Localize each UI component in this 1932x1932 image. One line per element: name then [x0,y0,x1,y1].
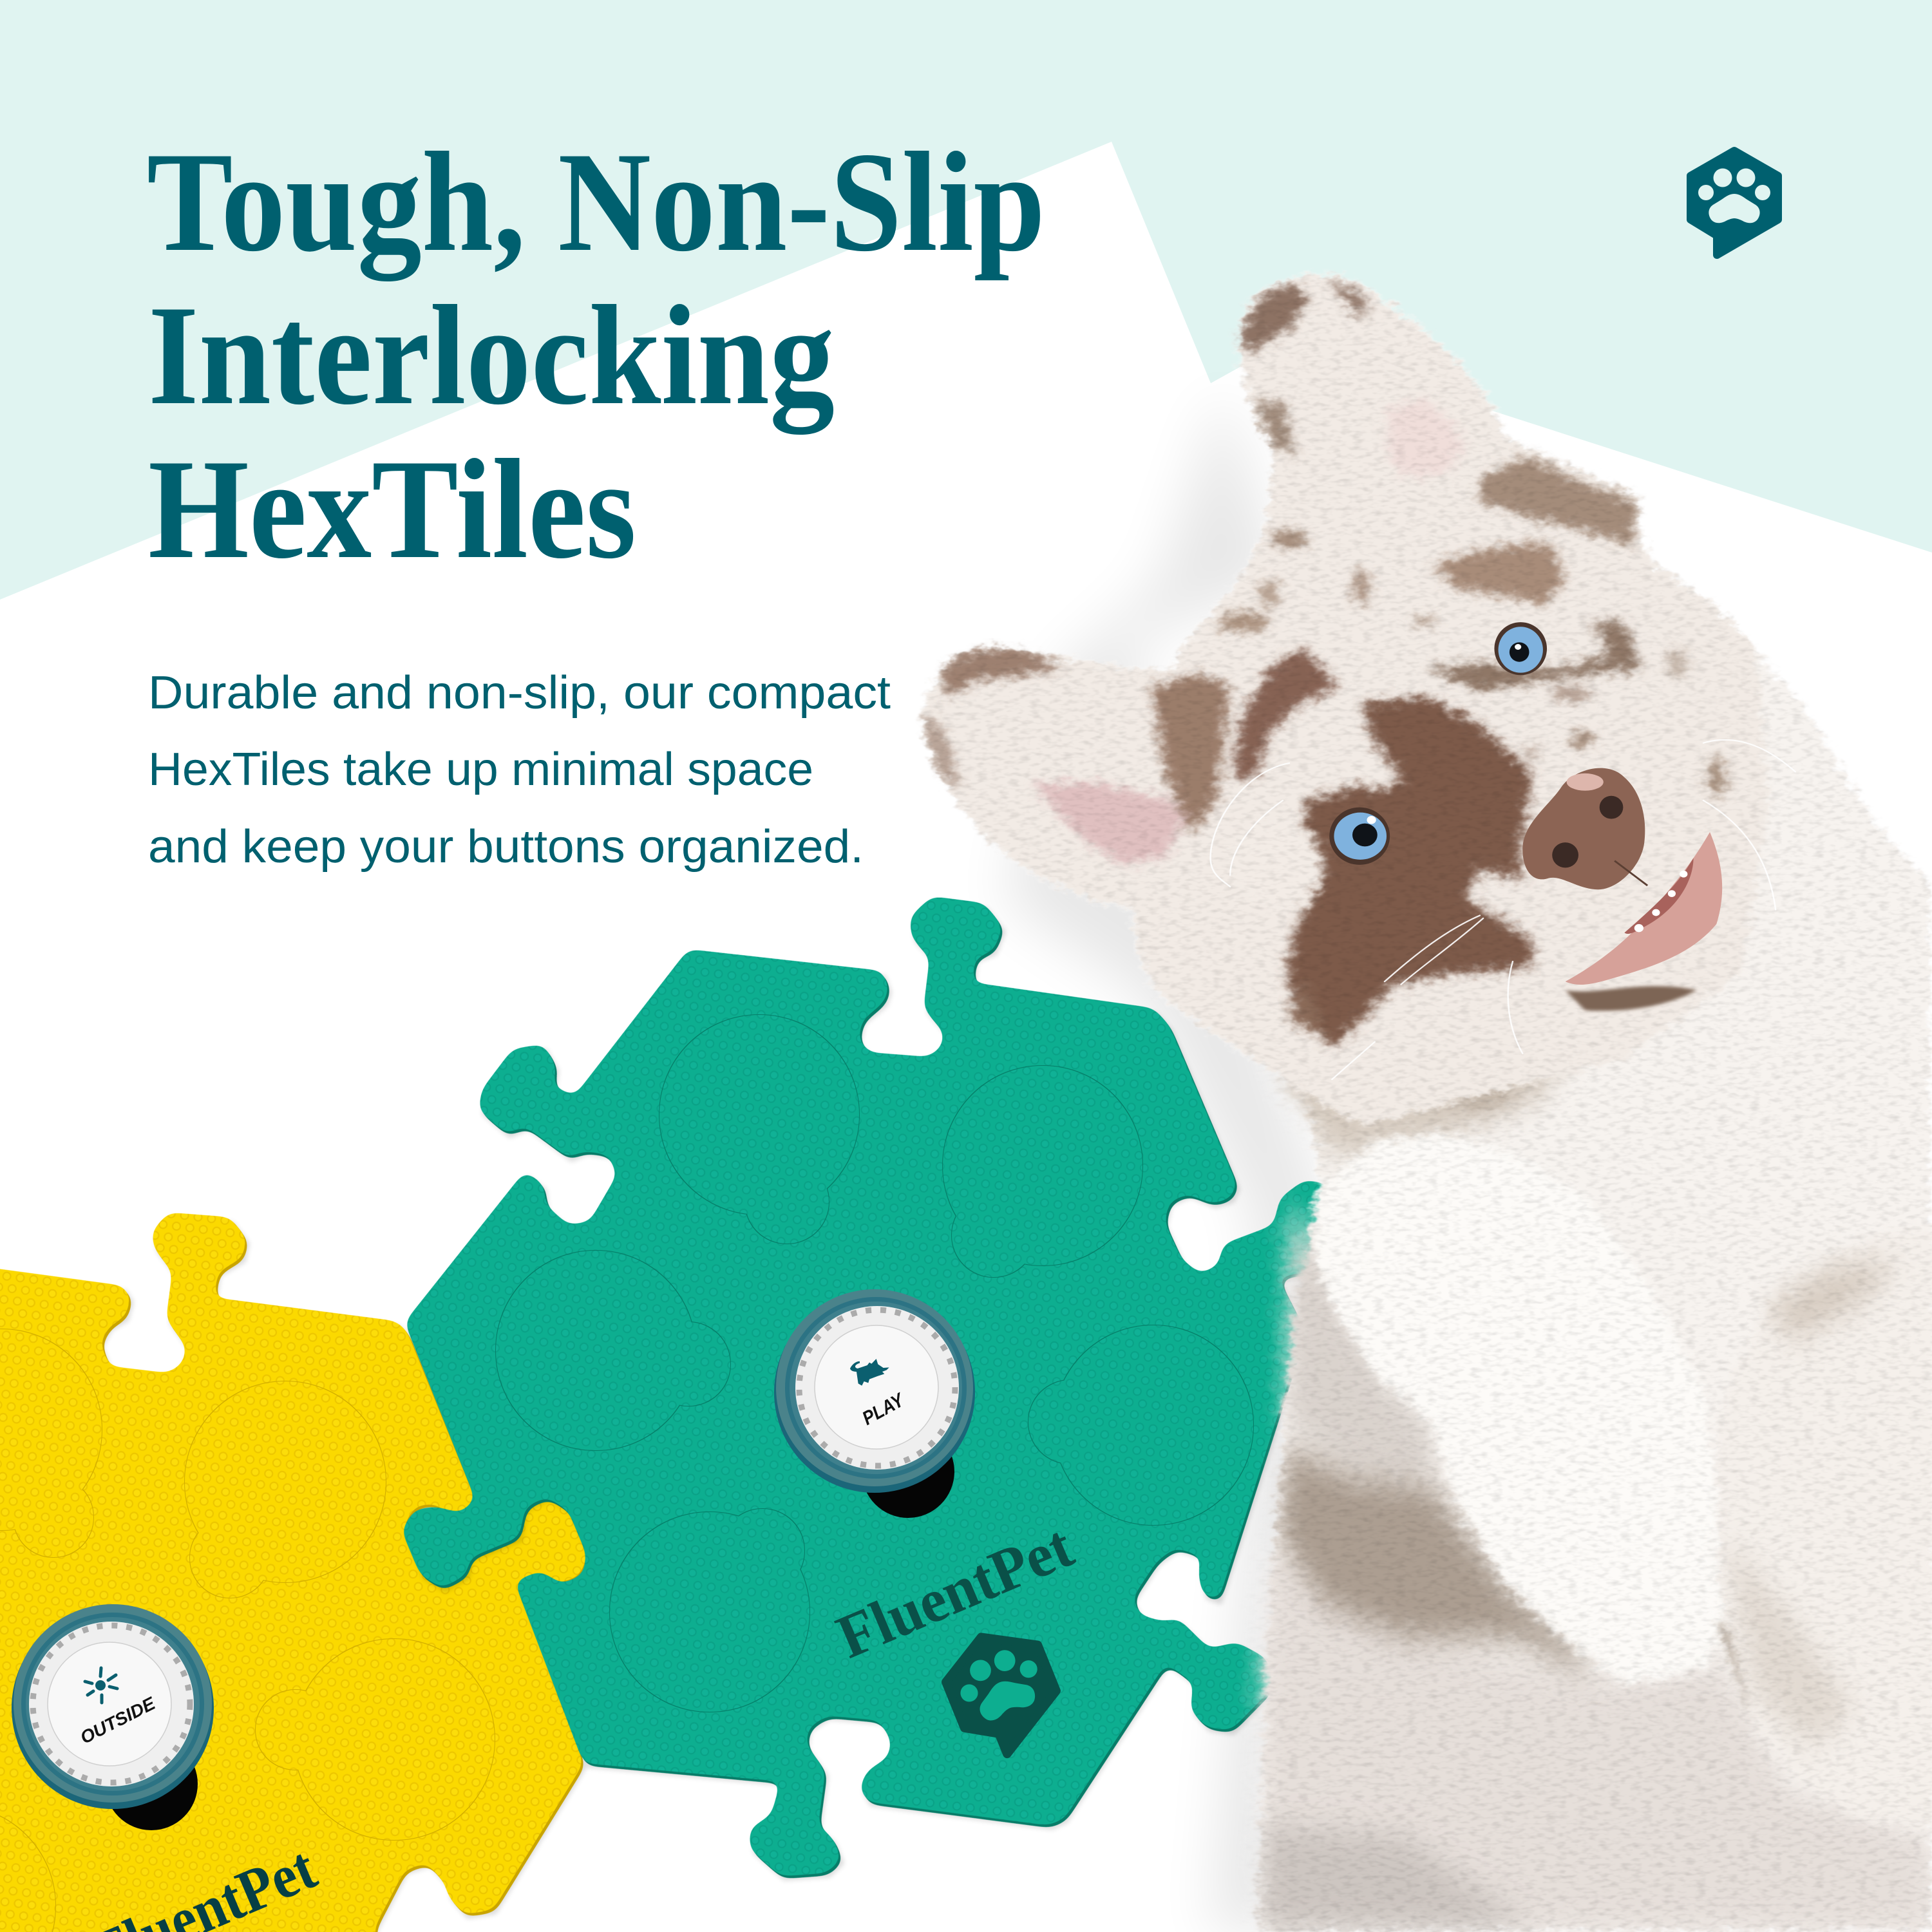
body text [148,667,891,873]
dog nose [1522,768,1647,889]
button slot outlines on green tile [496,1015,1253,1712]
dog head and ears [922,274,1769,1127]
button label: PLAY: PLAY [859,1389,909,1430]
dog left eye [1329,808,1390,865]
body text: and keep your buttons organized. [148,821,864,873]
dog white muzzle patch [1230,820,1322,907]
dog body shading [1260,1030,1932,1932]
button: PLAY [774,1289,975,1518]
body text: Durable and non-slip, our compact [148,667,891,719]
dog whiskers [1211,740,1795,1079]
dog [922,274,1932,1932]
dog fur: silhouette and coat markings [922,274,1932,1932]
button slot outlines on yellow tile [0,1329,495,1932]
dog face details [1211,622,1795,1079]
body text: HexTiles take up minimal space [148,744,813,795]
dog hind leg [1716,1226,1932,1830]
icon: cat [850,1359,889,1386]
title: Tough, Non-Slip [147,123,1045,281]
title: Interlocking [148,276,835,435]
title [147,123,1045,589]
dog right eye [1494,622,1547,675]
icon: sun [85,1668,117,1703]
soft shadow behind dog [1005,386,1352,1932]
title: HexTiles [148,430,636,589]
icon: FluentPet paw logo [1690,151,1778,255]
dog fur markings [922,277,1726,1048]
FluentPet wordmark on green tile: FluentPet [827,1511,1083,1671]
dog front paw [1314,1134,1725,1686]
icon: paw logo printed on green tile [935,1618,1071,1765]
panel: green hex tile [404,897,1324,1882]
dog mouth [1566,832,1722,985]
dog chin shadow [1566,986,1697,1011]
button: OUTSIDE [12,1604,214,1830]
button label: OUTSIDE: OUTSIDE [77,1693,159,1748]
dog body [1258,567,1932,1932]
panel: yellow hex tile [0,1213,587,1932]
